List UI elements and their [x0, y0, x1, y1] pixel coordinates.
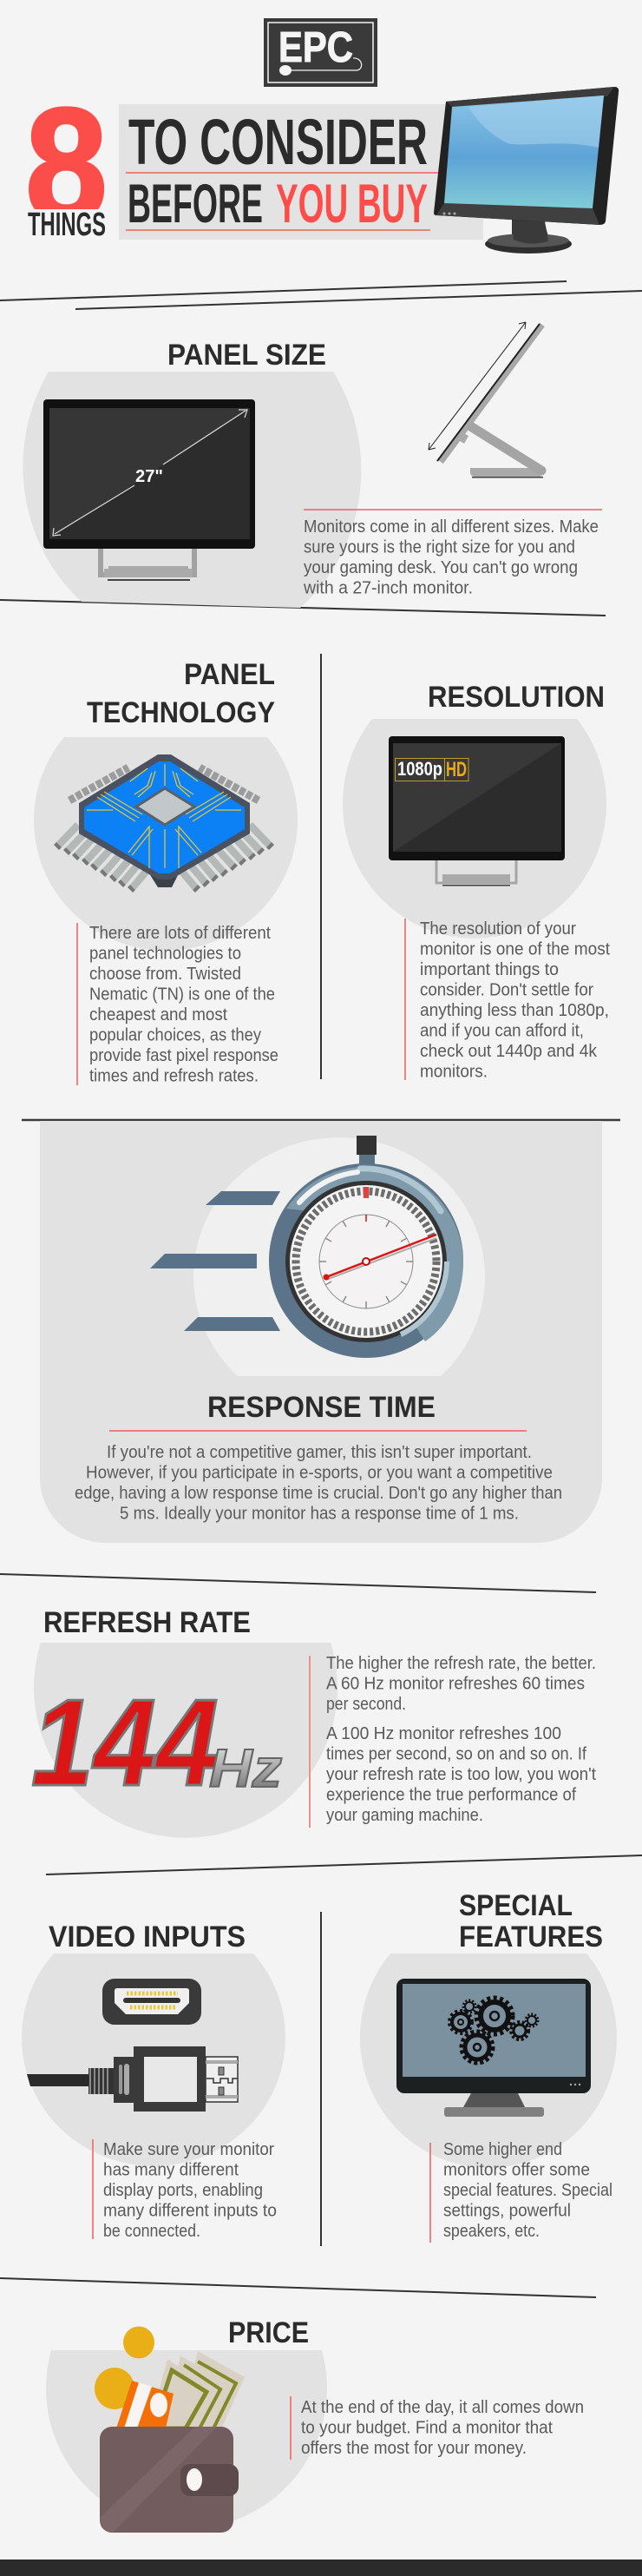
background shape	[343, 719, 606, 939]
panel: panel size	[23, 322, 602, 608]
text block: Make sure your monitor	[103, 2140, 274, 2159]
heading: VIDEO INPUTS	[49, 1920, 246, 1953]
background shape	[193, 1137, 485, 1376]
heading: PRICE	[228, 2316, 309, 2349]
text block: cheapest and most	[89, 1005, 227, 1024]
panel: video inputs	[22, 1920, 285, 2241]
icon: HDMI plug	[27, 2046, 238, 2112]
icon: 1080p monitor: HD	[446, 758, 467, 781]
text block: The resolution of your	[420, 919, 576, 939]
text block: There are lots of different	[89, 924, 271, 943]
text block: choose from. Twisted	[89, 965, 241, 984]
text block: anything less than 1080p,	[420, 1001, 609, 1020]
text block	[291, 2396, 584, 2460]
icon: speed bars	[150, 1191, 280, 1331]
text block: times and refresh rates.	[89, 1066, 259, 1085]
icon: monitor front view	[43, 399, 255, 581]
heading: RESOLUTION	[428, 681, 605, 714]
heading: REFRESH RATE	[43, 1606, 251, 1639]
text block: sure yours is the right size for you and	[304, 538, 575, 557]
panel: panel technology	[34, 658, 298, 1085]
text block: display ports, enabling	[103, 2181, 263, 2200]
text block: to your budget. Find a monitor that	[301, 2419, 553, 2438]
text block: times per second, so on and so on. If	[326, 1745, 586, 1764]
heading: PANEL SIZE	[167, 339, 326, 372]
text block: has many different	[103, 2160, 239, 2179]
text block: settings, powerful	[443, 2202, 571, 2221]
text block: panel technologies to	[89, 945, 241, 964]
background shape	[23, 372, 361, 608]
text block: consider. Don't settle for	[420, 981, 593, 1000]
heading: TECHNOLOGY	[87, 696, 275, 729]
text block	[310, 1654, 596, 1828]
panel: refresh rate	[31, 1606, 596, 1838]
text block: monitor is one of the most	[420, 939, 610, 959]
text block	[93, 2139, 277, 2241]
text block: your gaming machine.	[326, 1806, 483, 1825]
background shape	[46, 2350, 327, 2529]
title banner background	[119, 104, 483, 240]
icon: 1080p monitor: 1080p	[397, 758, 442, 780]
icon: microchip	[56, 754, 272, 890]
title: 8 things: THINGS	[28, 207, 106, 243]
icon: HDMI port	[102, 1979, 201, 2025]
text block: monitors.	[420, 1063, 488, 1082]
text block	[75, 1443, 562, 1523]
title: to consider before you buy	[126, 106, 438, 234]
text block: However, if you participate in e-sports, or you want a competitive	[86, 1464, 553, 1483]
text block: offers the most for your money.	[301, 2439, 527, 2458]
text block: edge, having a low response time is crucial. Don't go any higher than	[75, 1484, 562, 1503]
text block: and if you can afford it,	[420, 1021, 584, 1040]
title: to consider before you buy: TO CONSIDER	[128, 106, 428, 178]
text block: monitors offer some	[443, 2160, 590, 2179]
heading: FEATURES	[459, 1920, 603, 1953]
heading: RESPONSE TIME	[207, 1391, 436, 1424]
panel: special features	[360, 1889, 617, 2243]
text block: Monitors come in all different sizes. Make	[304, 517, 599, 537]
text block: 5 ms. Ideally your monitor has a response time of 1 ms.	[120, 1504, 519, 1523]
heading: PANEL	[184, 658, 275, 691]
text block	[303, 510, 602, 597]
panel: price	[46, 2316, 584, 2533]
footer bar	[0, 2560, 642, 2576]
background shape	[360, 1953, 617, 2168]
heading: SPECIAL	[459, 1889, 573, 1922]
text block: A 100 Hz monitor refreshes 100	[326, 1724, 561, 1743]
text block: be connected.	[103, 2222, 200, 2241]
text block: your gaming desk. You can't go wrong	[304, 558, 578, 577]
text block: many different inputs to	[103, 2202, 277, 2221]
title: to consider before you buy: BEFORE	[128, 174, 263, 234]
text block: check out 1440p and 4k	[420, 1042, 598, 1061]
text block: speakers, etc.	[443, 2222, 540, 2241]
title: 8 things	[28, 106, 106, 236]
text block	[430, 2140, 613, 2243]
panel: response time	[40, 1121, 602, 1543]
icon: 1080p monitor	[389, 736, 565, 886]
text block: with a 27-inch monitor.	[303, 578, 473, 597]
logo: EPC: EPC	[278, 24, 353, 71]
heading	[87, 658, 275, 729]
background shape	[34, 1643, 337, 1838]
text block	[77, 923, 278, 1085]
text block: important things to	[420, 960, 559, 979]
icon: monitor front view: 27"	[135, 467, 163, 486]
text block: The higher the refresh rate, the better.	[326, 1654, 596, 1673]
icon: monitor with gears	[396, 1979, 591, 2117]
title: to consider before you buy: YOU BUY	[276, 174, 428, 234]
icon: desktop monitor	[434, 87, 619, 254]
icon: stopwatch	[269, 1136, 463, 1358]
icon: monitor side view	[429, 322, 543, 478]
text block: Nematic (TN) is one of the	[89, 985, 275, 1004]
logo: EPC	[264, 18, 377, 87]
title: 8 things: 8	[25, 76, 108, 254]
icon: wallet with money	[95, 2327, 245, 2533]
text block: popular choices, as they	[89, 1026, 261, 1045]
text block: experience the true performance of	[326, 1785, 576, 1804]
icon: 144Hz: 144	[31, 1674, 219, 1812]
panel: resolution	[343, 681, 610, 1082]
text block: per second.	[326, 1695, 406, 1714]
text block: provide fast pixel response	[89, 1046, 278, 1065]
text block: your refresh rate is too low, you won't	[326, 1765, 596, 1784]
text block	[405, 919, 610, 1082]
text block: special features. Special	[443, 2181, 613, 2200]
text block: Some higher end	[443, 2140, 562, 2159]
background shape	[34, 737, 298, 951]
text block: If you're not a competitive gamer, this isn't super important.	[107, 1443, 532, 1462]
heading	[459, 1889, 603, 1953]
background shape	[22, 1953, 285, 2166]
text block: At the end of the day, it all comes down	[301, 2398, 584, 2417]
icon: 144Hz: Hz	[209, 1739, 282, 1799]
background card	[40, 1121, 602, 1543]
text block: A 60 Hz monitor refreshes 60 times	[326, 1674, 585, 1693]
